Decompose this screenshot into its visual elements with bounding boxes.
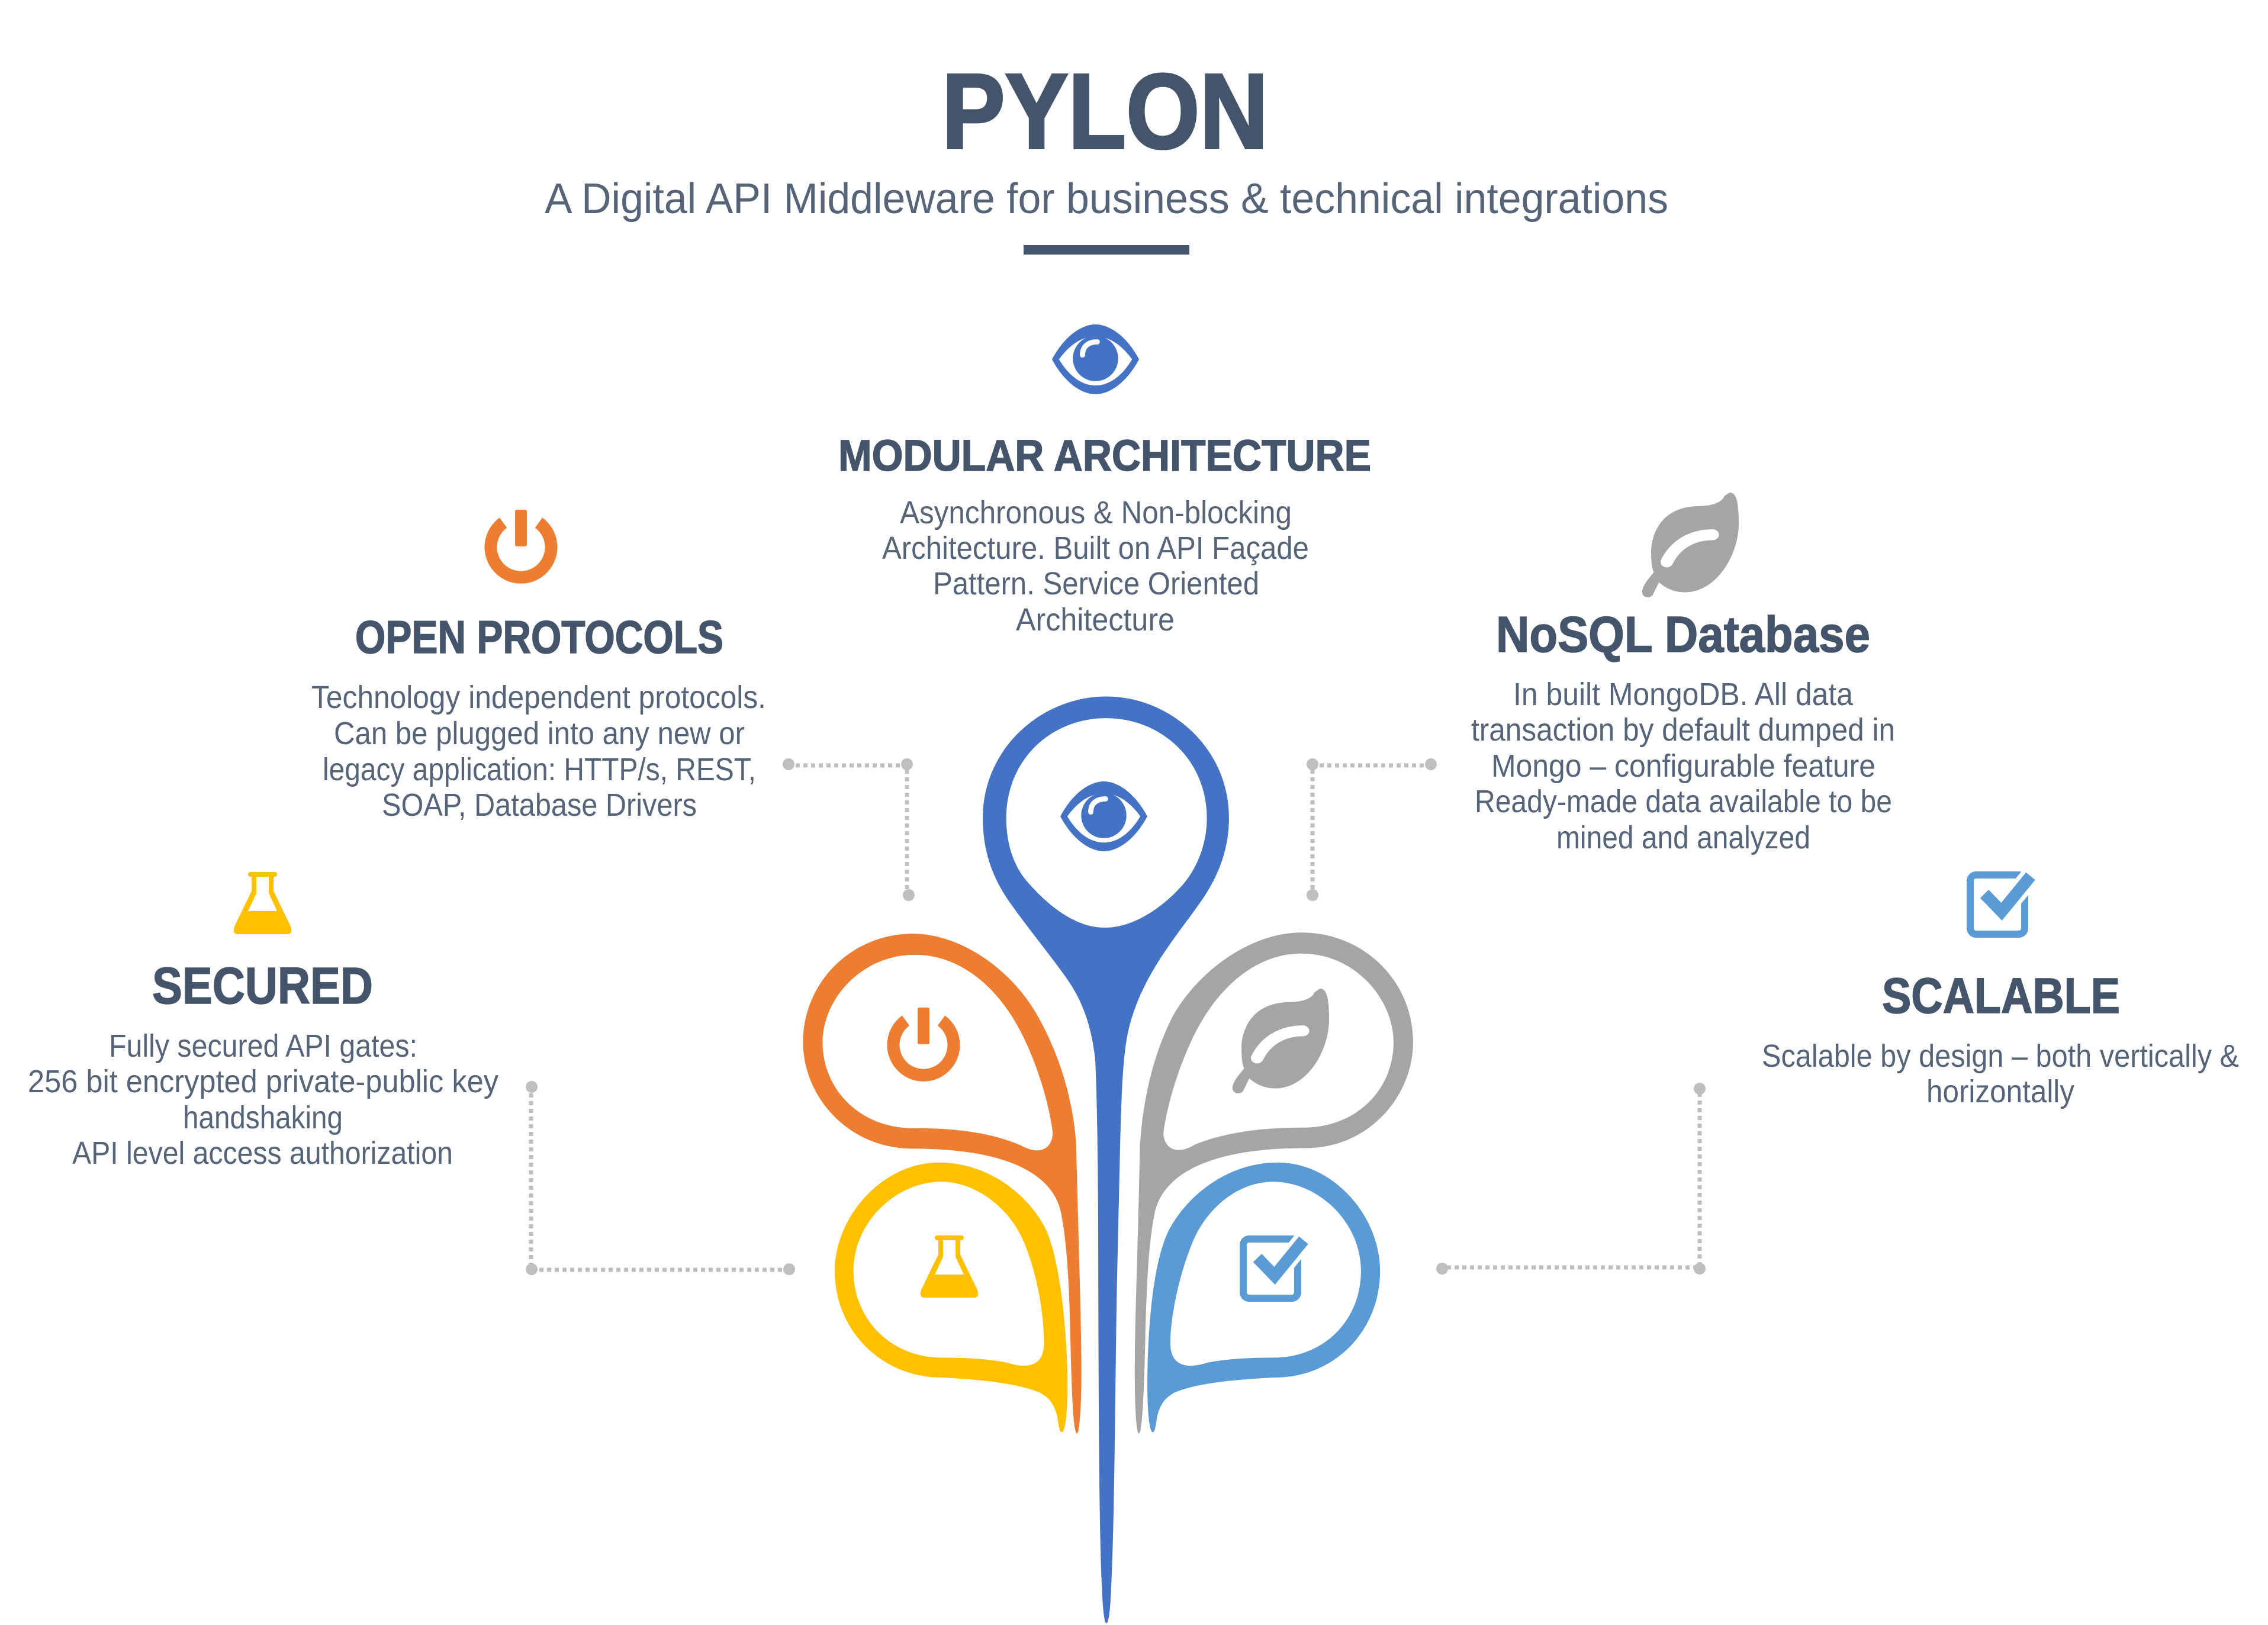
text block: modular architecture description: Architecture. Built on API Façade	[882, 530, 1309, 566]
petal: yellow	[835, 1163, 1067, 1432]
text block: open protocols description: Can be plugged into any new or	[334, 716, 745, 751]
connector: open protocols	[783, 758, 915, 901]
subtitle: A Digital API Middleware for business & technical integrations	[545, 175, 1668, 223]
text block: secured description: handshaking	[183, 1100, 343, 1135]
text block: open protocols description	[311, 680, 766, 823]
icon: eye in blue petal	[1060, 781, 1147, 851]
icon: leaf	[1642, 493, 1739, 597]
icon: power	[491, 510, 551, 577]
text block: nosql description: Mongo – configurable feature	[1491, 748, 1875, 784]
icon: leaf in gray petal	[1233, 989, 1329, 1093]
text block: scalable description: horizontally	[1926, 1074, 2074, 1109]
icon: flask in yellow petal	[921, 1235, 978, 1298]
text block: modular architecture description: Asynchronous & Non-blocking	[900, 495, 1292, 530]
icon: eye	[1052, 324, 1139, 394]
panel: modular architecture	[838, 324, 1371, 638]
connector: secured	[526, 1081, 795, 1275]
text block: secured description: 256 bit encrypted private-public key	[28, 1064, 498, 1099]
petal: orange	[803, 934, 1082, 1434]
panel: nosql database	[1471, 493, 1895, 855]
text block: modular architecture description	[882, 495, 1309, 638]
heading: nosql database: NoSQL Database	[1496, 607, 1870, 663]
panel: scalable	[1762, 875, 2239, 1109]
text block: open protocols description: SOAP, Database Drivers	[382, 787, 697, 823]
icon: power in orange petal	[893, 1008, 954, 1075]
tree diagram	[803, 696, 1413, 1623]
text block: secured description: API level access authorization	[72, 1135, 453, 1171]
panel: open protocols	[311, 510, 766, 823]
text block: nosql description: Ready-made data available to be	[1475, 784, 1892, 819]
petal: gray	[1135, 932, 1413, 1434]
text block: secured description: Fully secured API gates:	[109, 1028, 417, 1064]
heading: modular architecture: MODULAR ARCHITECTURE	[838, 431, 1371, 480]
text block: scalable description	[1762, 1038, 2239, 1109]
icon: flask	[234, 872, 291, 934]
petal: light blue	[1147, 1163, 1380, 1432]
icon: checkbox in light blue petal	[1243, 1239, 1304, 1298]
petal: blue stem	[983, 696, 1229, 1623]
text block: modular architecture description: Architecture	[1016, 602, 1175, 638]
text block: nosql description: In built MongoDB. All data	[1513, 677, 1854, 712]
heading: open protocols: OPEN PROTOCOLS	[355, 611, 723, 663]
text block: modular architecture description: Pattern. Service Oriented	[933, 566, 1259, 601]
connector: nosql	[1307, 758, 1437, 901]
text block: secured description	[28, 1028, 498, 1171]
heading: secured: SECURED	[152, 957, 373, 1015]
text block: open protocols description: Technology independent protocols.	[311, 680, 766, 715]
connector: scalable	[1436, 1083, 1706, 1275]
text block: nosql description: transaction by default dumped in	[1471, 712, 1895, 748]
icon: checkbox	[1970, 875, 2031, 934]
heading: scalable: SCALABLE	[1882, 968, 2120, 1024]
title: PYLON: PYLON	[942, 52, 1268, 171]
title underline bar	[1024, 245, 1189, 255]
text block: nosql description	[1471, 677, 1895, 855]
text block: open protocols description: legacy application: HTTP/s, REST,	[323, 752, 756, 787]
text block: nosql description: mined and analyzed	[1556, 820, 1810, 855]
panel: secured	[28, 872, 498, 1171]
